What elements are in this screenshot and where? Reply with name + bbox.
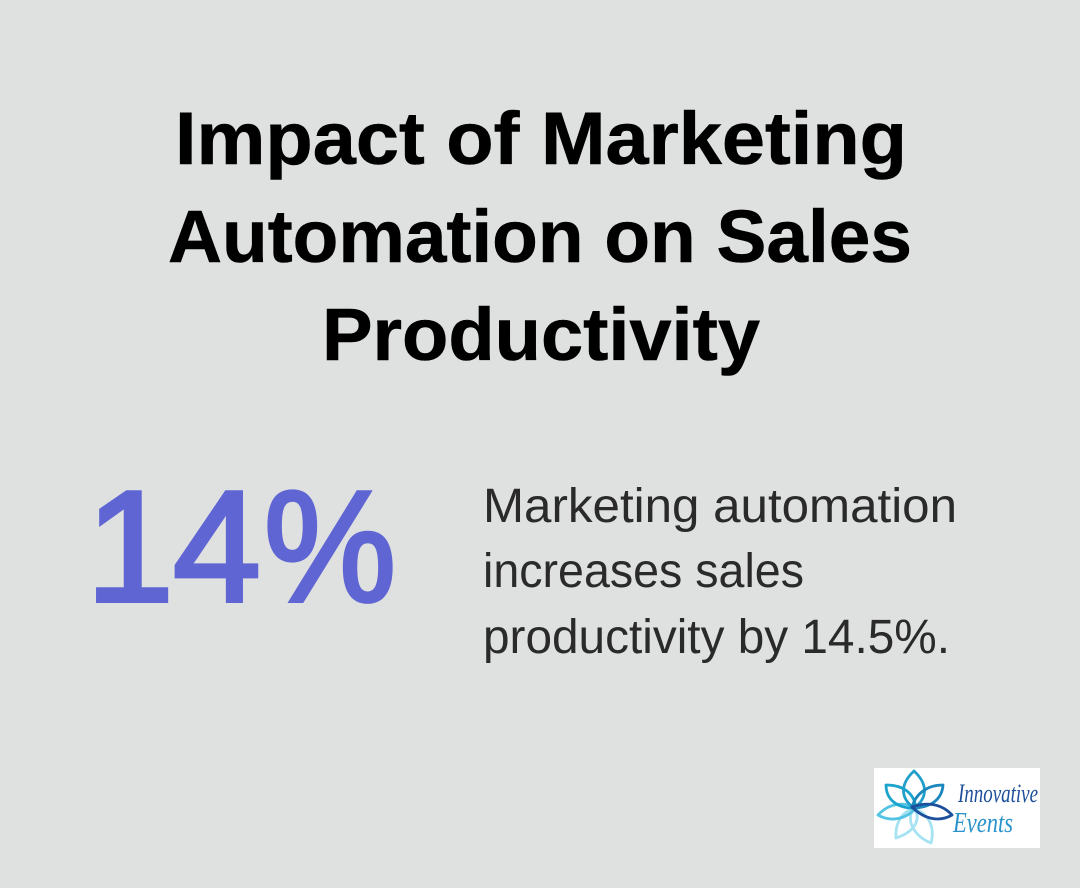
logo wordmark: Innovative — [957, 779, 1038, 808]
big stat: 14% — [86, 459, 396, 635]
title: Impact of Marketing — [175, 97, 907, 180]
icon: lotus flower — [878, 771, 952, 843]
big stat: 14%: % — [264, 459, 396, 635]
title: Automation on Sales — [168, 195, 912, 278]
title — [168, 97, 912, 376]
stat description: Marketing automation — [483, 480, 957, 533]
stat description — [483, 480, 957, 664]
logo: Innovative Events: Events — [952, 807, 1013, 839]
title: Productivity — [322, 293, 760, 376]
stat description: increases sales — [483, 545, 804, 598]
big stat: 14%: 14 — [86, 459, 261, 635]
logo: Innovative Events — [874, 768, 1040, 848]
stat description: productivity by 14.5%. — [483, 611, 950, 664]
